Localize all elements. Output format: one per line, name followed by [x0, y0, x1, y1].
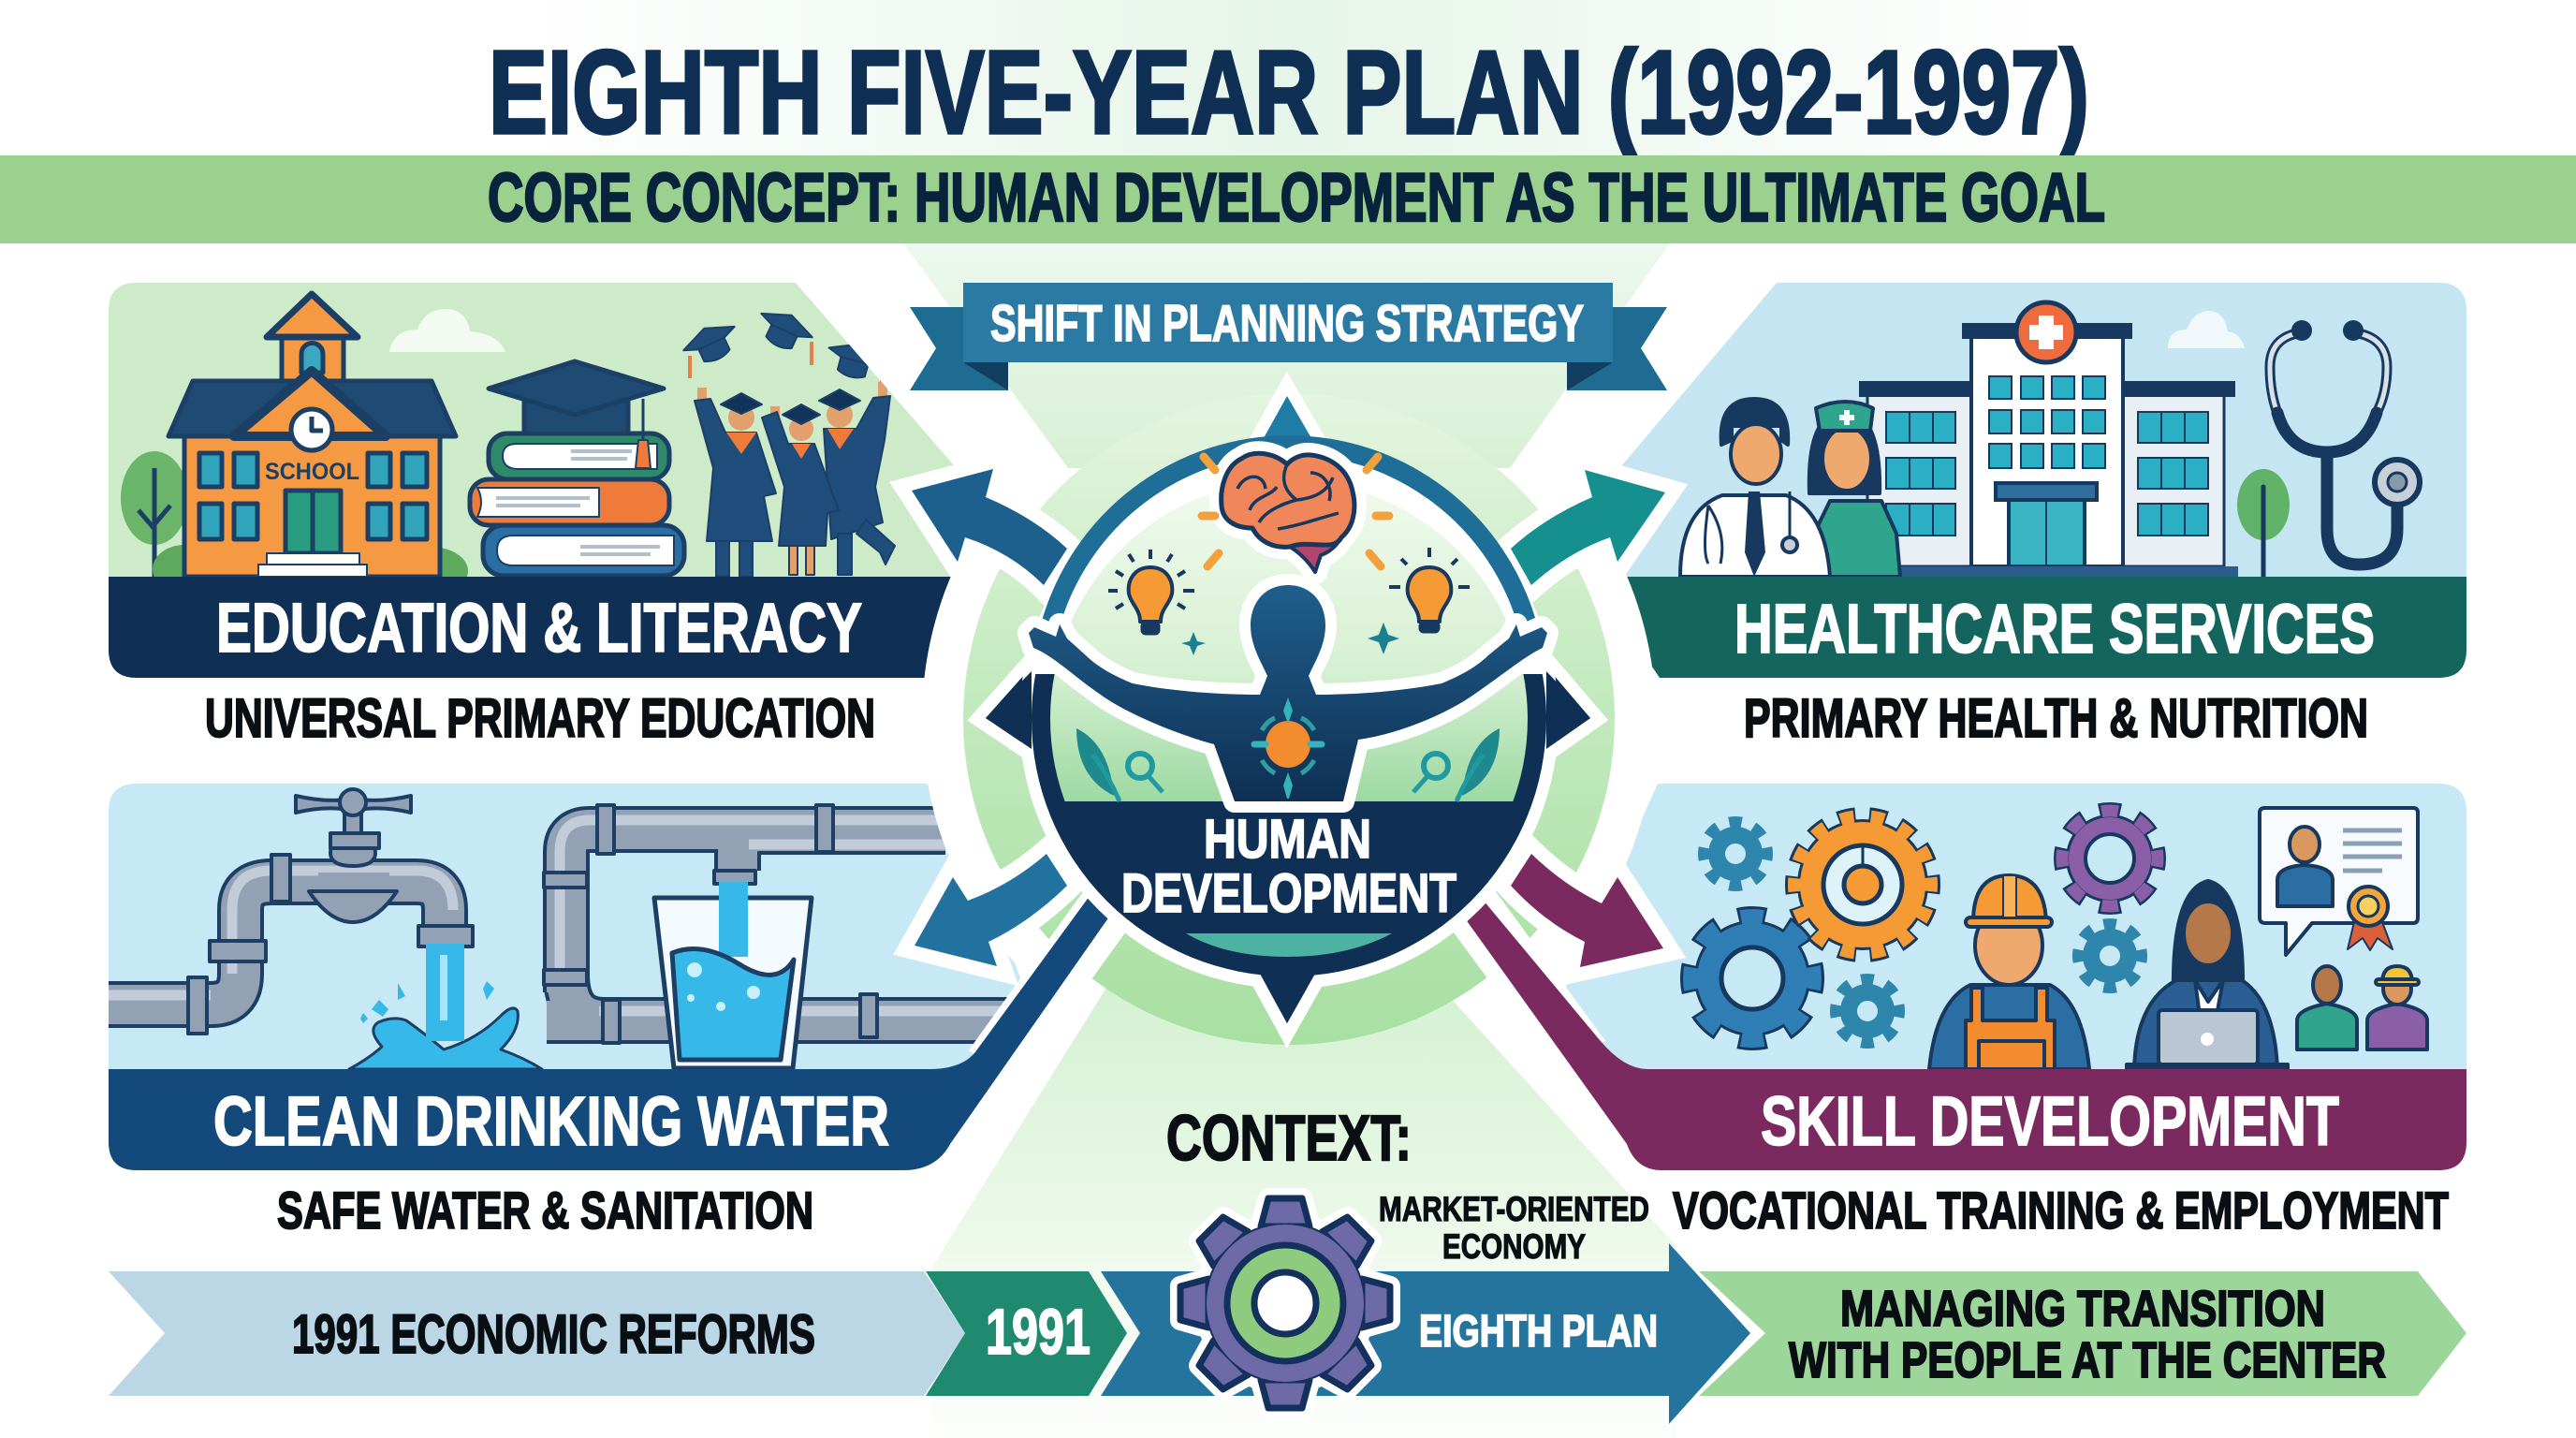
sparkles	[1181, 623, 1399, 655]
emblem text: DEVELOPMENT	[1121, 863, 1456, 924]
label: skill development: SKILL DEVELOPMENT	[1761, 1082, 2339, 1160]
market-oriented economy note: ECONOMY	[1442, 1227, 1586, 1266]
core glow	[1254, 697, 1322, 799]
emblem text	[1121, 809, 1456, 924]
band: education and literacy	[109, 577, 973, 678]
background wedges	[903, 243, 1676, 1438]
subtitle: universal primary education: UNIVERSAL PRIMARY EDUCATION	[205, 688, 875, 749]
illustration: graduates	[679, 303, 895, 577]
timeline: eighth plan arrow	[1101, 1243, 1750, 1424]
banner: shift in planning strategy: SHIFT IN PLANNING STRATEGY	[990, 294, 1584, 352]
illustration: small people	[2297, 966, 2427, 1049]
illustration: glass of water	[654, 882, 812, 1068]
timeline: 1991 economic reforms	[109, 1271, 965, 1396]
timeline: 1991 economic reforms: 1991 ECONOMIC REFORMS	[292, 1304, 815, 1365]
icon: bulb left	[1108, 550, 1194, 635]
brain icon	[1222, 453, 1354, 572]
ring arc	[1050, 445, 1528, 625]
illustration: stethoscope	[2237, 320, 2420, 577]
panel: clean drinking water	[94, 784, 1030, 1069]
icon: central gear	[1180, 1198, 1390, 1408]
timeline: managing transition: WITH PEOPLE AT THE CENTER	[1789, 1332, 2386, 1388]
subtitle: safe water and sanitation: SAFE WATER & SANITATION	[277, 1181, 813, 1240]
illustration: books and cap	[470, 361, 684, 576]
illustration: pipes and faucet	[94, 820, 1030, 1020]
illustration: speech bubble and certificate	[2260, 808, 2418, 955]
banner: shift in planning strategy	[910, 283, 1667, 390]
arrow: to water	[915, 854, 1067, 966]
panel: skill development	[1563, 784, 2466, 1069]
teal crescent	[1186, 933, 1392, 957]
illustration: hospital	[1861, 302, 2245, 577]
arrow: to skills	[1511, 854, 1663, 967]
label: healthcare services: HEALTHCARE SERVICES	[1734, 590, 2375, 668]
icon: bulb right	[1389, 548, 1470, 633]
illustration: doctor and nurse	[1680, 399, 1900, 577]
illustration: gears	[1692, 811, 2158, 1042]
title: EIGHTH FIVE-YEAR PLAN (1992-1997)	[489, 26, 2089, 158]
core concept band	[0, 155, 2576, 243]
panel: education and literacy	[109, 283, 953, 678]
illustration: woman with laptop	[2127, 881, 2288, 1069]
market-oriented economy note: MARKET-ORIENTED	[1379, 1190, 1649, 1228]
subtitle: primary health and nutrition: PRIMARY HEALTH & NUTRITION	[1744, 688, 2368, 749]
emblem text: HUMAN	[1204, 809, 1371, 870]
arrow: to healthcare	[1511, 470, 1665, 585]
timeline: 1991: 1991	[986, 1296, 1090, 1368]
stripe: water band connector	[109, 882, 1134, 1170]
human figure	[1029, 585, 1547, 801]
label: clean drinking water: CLEAN DRINKING WATER	[213, 1082, 889, 1160]
panel: education and literacy: SCHOOL	[265, 459, 359, 485]
panel: healthcare services	[1621, 283, 2466, 678]
stripe: skill band connector	[1446, 889, 2466, 1170]
illustration: worker	[1929, 875, 2089, 1069]
timeline: managing transition: MANAGING TRANSITION	[1840, 1281, 2325, 1337]
arrow: to education	[912, 469, 1067, 585]
timeline: managing transition	[1699, 1271, 2466, 1396]
band: healthcare services	[1591, 577, 2466, 678]
white halo circle	[922, 352, 1656, 1086]
emblem points	[986, 396, 1590, 1023]
timeline: 1991	[926, 1271, 1127, 1396]
illustration: water stream and splash	[349, 944, 542, 1069]
sparks	[1202, 457, 1389, 566]
central emblem: human development	[986, 396, 1590, 1023]
timeline: eighth plan arrow: EIGHTH PLAN	[1419, 1307, 1658, 1357]
label: education and literacy: EDUCATION & LITERACY	[216, 589, 862, 667]
context heading: CONTEXT:	[1166, 1102, 1412, 1174]
market-oriented economy note	[1379, 1190, 1649, 1266]
icon: leaves	[1076, 728, 1500, 801]
illustration: school	[121, 294, 505, 595]
